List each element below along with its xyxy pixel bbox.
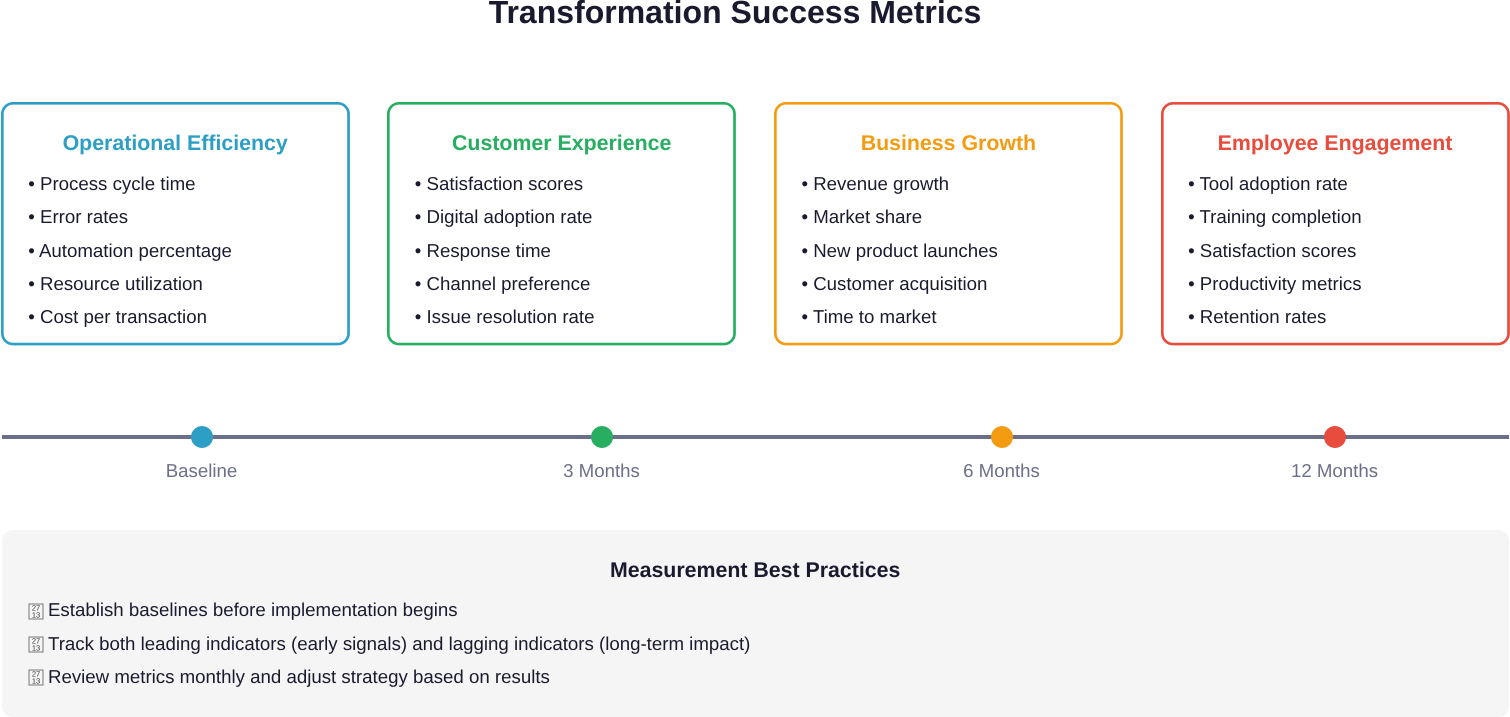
list: customer experience metrics [415, 173, 594, 327]
list: operational efficiency metrics [28, 173, 232, 327]
list: business growth metrics: • Market share [801, 206, 922, 227]
list: employee engagement metrics: • Productivity metrics [1188, 273, 1362, 294]
timeline label: baseline: Baseline [166, 460, 237, 480]
list: business growth metrics: • Time to market [801, 306, 937, 327]
panel: business growth [774, 102, 1123, 346]
timeline label: 3 months: 3 Months [563, 460, 640, 480]
list: operational efficiency metrics: • Resource utilization [28, 273, 203, 294]
list: operational efficiency metrics: • Cost per transaction [28, 306, 207, 327]
timeline marker: 12 months [1324, 426, 1346, 448]
list: customer experience metrics: • Digital adoption rate [415, 206, 592, 227]
panel: measurement best practices: Track both leading indicators (early signals) and lagging indicators (long-term impact) [48, 633, 750, 654]
list: operational efficiency metrics: • Error rates [28, 206, 128, 227]
timeline label: 12 months: 12 Months [1291, 460, 1378, 480]
list: business growth metrics: • Customer acquisition [801, 273, 987, 294]
list: customer experience metrics: • Issue resolution rate [415, 306, 594, 327]
panel: measurement best practices: 27 [32, 670, 40, 679]
panel: measurement best practices: Establish baselines before implementation begins [48, 599, 458, 620]
timeline line [2, 435, 1509, 439]
practice item: indicators [28, 633, 750, 654]
heading: operational efficiency: Operational Efficiency [63, 131, 288, 155]
heading: measurement best practices: Measurement Best Practices [610, 558, 900, 582]
timeline marker: 3 months [590, 426, 612, 448]
practice item: baselines [28, 599, 458, 620]
panel: measurement best practices: 13 [32, 610, 40, 619]
heading: customer experience: Customer Experience [452, 131, 671, 155]
timeline marker: 6 months [990, 426, 1012, 448]
panel: measurement best practices [2, 530, 1509, 717]
list: business growth metrics: • Revenue growth [801, 173, 949, 194]
list: employee engagement metrics: • Satisfaction scores [1188, 240, 1356, 261]
timeline marker: baseline [190, 426, 212, 448]
list: operational efficiency metrics: • Automation percentage [28, 240, 232, 261]
panel: measurement best practices: 27 [32, 636, 40, 645]
panel: measurement best practices: 13 [32, 677, 40, 686]
list: customer experience metrics: • Satisfaction scores [415, 173, 583, 194]
list: employee engagement metrics [1188, 173, 1362, 327]
panel: customer experience [387, 102, 736, 346]
list: employee engagement metrics: • Training completion [1188, 206, 1362, 227]
panel: measurement best practices: Review metrics monthly and adjust strategy based on results [48, 666, 550, 687]
panel: employee engagement [1161, 102, 1510, 346]
list: employee engagement metrics: • Tool adoption rate [1188, 173, 1348, 194]
panel: measurement best practices: 13 [32, 643, 40, 652]
list: customer experience metrics: • Response time [415, 240, 551, 261]
practice item: review [28, 666, 550, 687]
list: employee engagement metrics: • Retention rates [1188, 306, 1326, 327]
heading: employee engagement: Employee Engagement [1218, 131, 1452, 155]
list: customer experience metrics: • Channel preference [415, 273, 590, 294]
heading: business growth: Business Growth [861, 131, 1036, 155]
timeline label: 6 months: 6 Months [963, 460, 1040, 480]
list: business growth metrics [801, 173, 998, 327]
list: operational efficiency metrics: • Process cycle time [28, 173, 196, 194]
panel: operational efficiency [1, 102, 350, 346]
list: business growth metrics: • New product launches [801, 240, 998, 261]
panel: measurement best practices: 27 [32, 603, 40, 612]
